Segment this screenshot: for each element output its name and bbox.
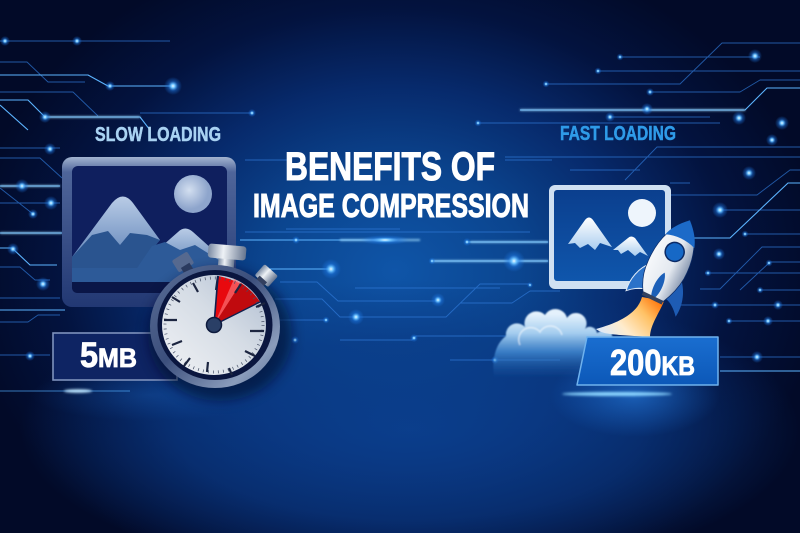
stopwatch crown [207, 243, 247, 270]
rocket window [662, 239, 687, 265]
rocket nose [665, 213, 704, 248]
icon: stopwatch [148, 243, 292, 401]
panel: slow large image [62, 157, 236, 307]
badge: 200KB: 200KB [610, 342, 695, 383]
badge: 5MB [53, 333, 177, 380]
panel: fast small image [549, 185, 671, 289]
stopwatch left button [172, 251, 197, 277]
badge: 200KB [577, 337, 718, 385]
badge: 5MB: 5MB [80, 336, 137, 375]
rocket right fin [660, 275, 693, 317]
rocket centre fin [649, 271, 668, 299]
title [253, 145, 529, 224]
label: fast loading: FAST LOADING [560, 122, 676, 145]
rocket body [635, 212, 708, 306]
title: BENEFITS OF [285, 145, 495, 189]
stopwatch right button [251, 264, 278, 291]
icon: rocket [625, 208, 716, 317]
icon: rocket flame [596, 297, 664, 337]
icon: cloud [493, 309, 612, 378]
circuit lines [0, 41, 800, 371]
floor glow under badge [562, 392, 672, 396]
label: slow loading: SLOW LOADING [95, 123, 221, 146]
red elapsed sector [214, 276, 260, 325]
glowing nodes [0, 36, 789, 364]
dial ticks [164, 276, 265, 375]
title: IMAGE COMPRESSION [253, 187, 529, 224]
rocket left fin [626, 258, 657, 298]
